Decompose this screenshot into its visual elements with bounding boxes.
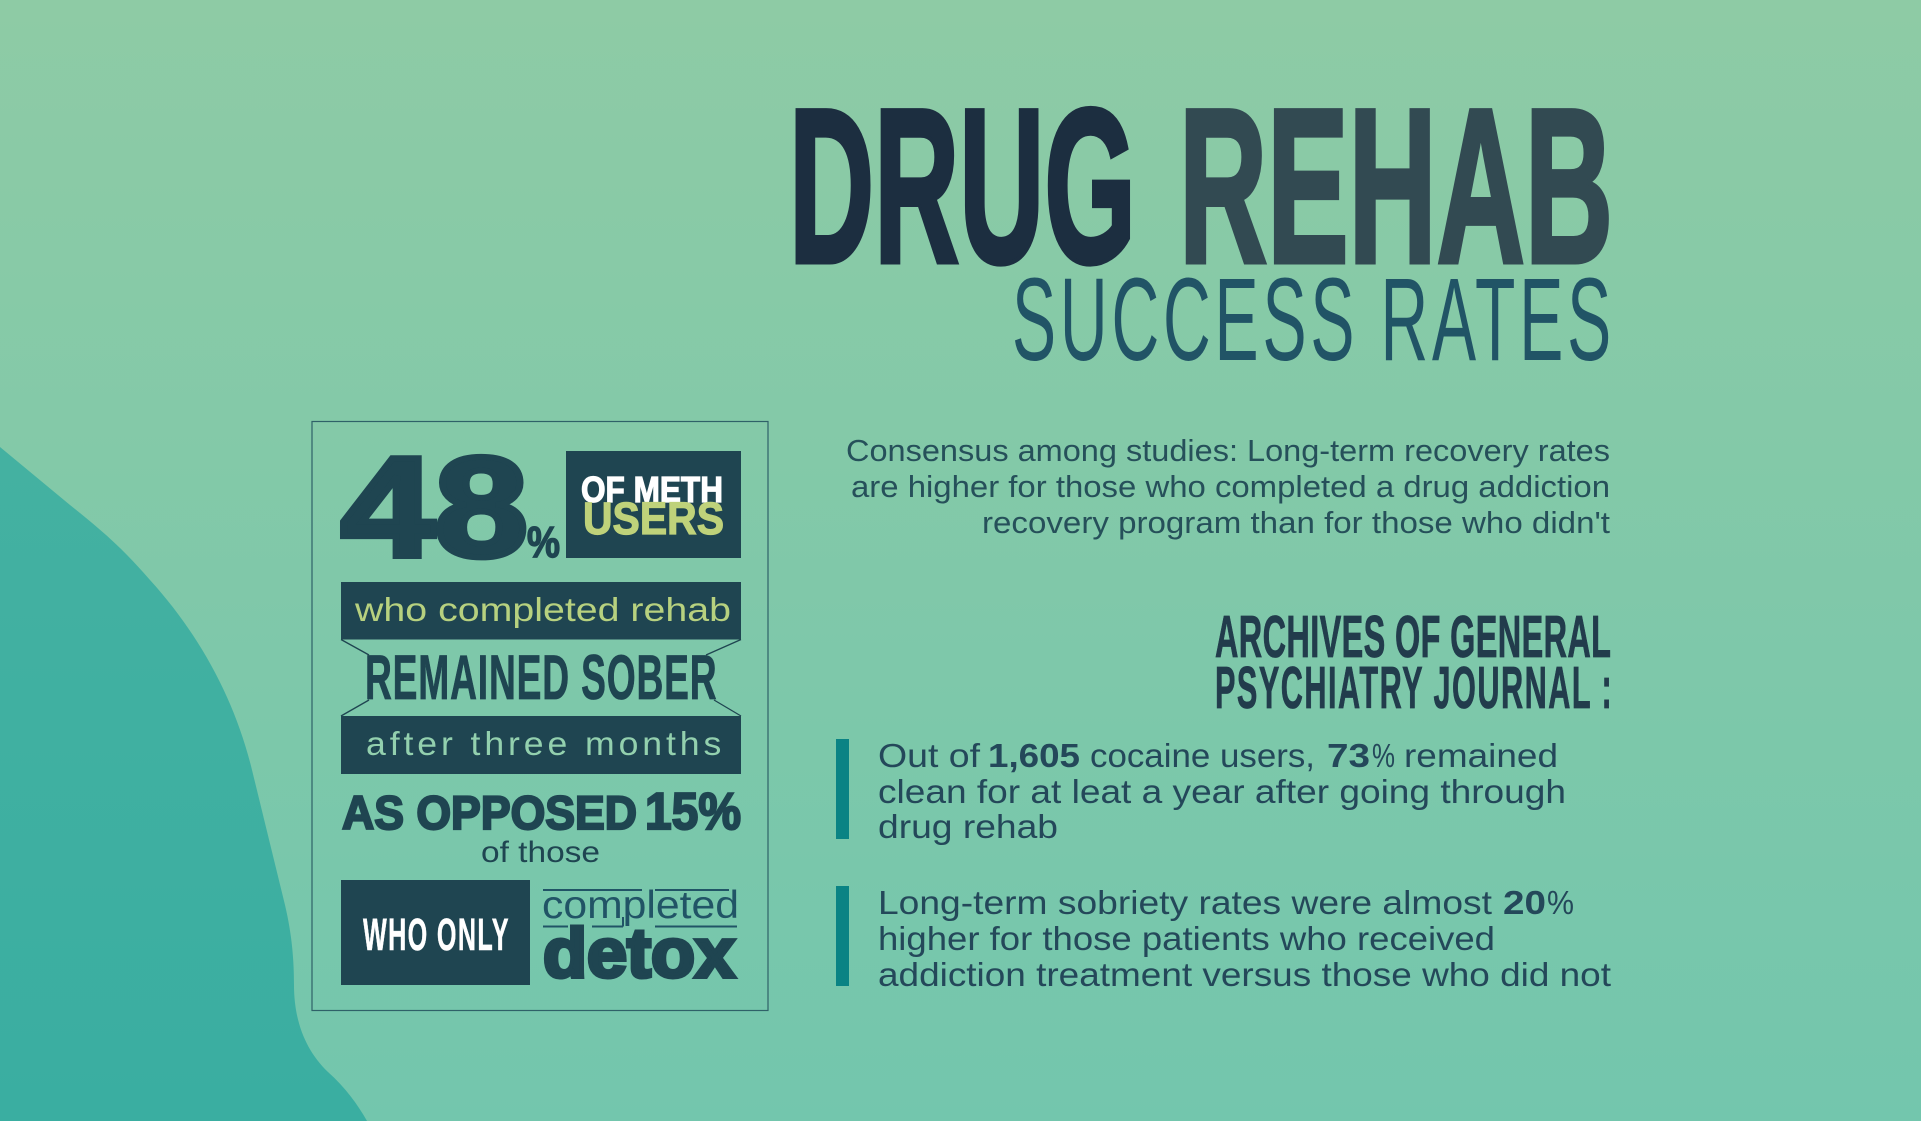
finding text: Long-term sobriety rates were almost (878, 884, 1492, 921)
box: who only: WHO ONLY (363, 909, 509, 960)
text: completed detox: completed (542, 884, 739, 927)
finding text: clean for at leat a year after going through (878, 773, 1566, 810)
label: of meth users: OF METH (581, 469, 723, 510)
ribbon folds (341, 640, 741, 716)
accent bar (836, 739, 849, 839)
finding: long-term sobriety (836, 884, 1611, 993)
statistic: 48 percent: 48 (341, 428, 528, 587)
label: of meth users (566, 451, 741, 558)
banner: who completed rehab: who completed rehab (354, 591, 731, 628)
intro paragraph (846, 433, 1610, 540)
finding text (878, 737, 1566, 845)
intro paragraph: Consensus among studies: Long-term recovery rates (846, 433, 1610, 468)
panel: meth users statistics (312, 422, 768, 1010)
finding text: higher for those patients who received (878, 920, 1495, 957)
banner: after three months (341, 716, 741, 774)
heading: archives of general psychiatry journal (1215, 605, 1612, 721)
heading: archives of general psychiatry journal: PSYCHIATRY JOURNAL : (1215, 654, 1612, 721)
finding text: % (1547, 884, 1574, 921)
statistic: as opposed 15 percent: 15% (645, 783, 741, 841)
intro paragraph: are higher for those who completed a drug addiction (851, 469, 1610, 504)
title: success rates: SUCCESS RATES (1012, 254, 1611, 386)
decorative teal blob (0, 447, 367, 1121)
finding text: drug rehab (878, 808, 1058, 845)
banner: after three months: after three months (366, 726, 721, 763)
text: remained sober: REMAINED SOBER (365, 642, 717, 712)
text: completed detox (542, 884, 739, 992)
finding text: 73 (1327, 737, 1370, 774)
statistic: as opposed 15 percent: AS OPPOSED (342, 786, 637, 839)
finding text: 20 (1503, 884, 1546, 921)
finding: cocaine users (836, 737, 1566, 845)
panel border (312, 422, 768, 1010)
finding text (878, 884, 1611, 993)
title (789, 63, 1613, 386)
banner: who completed rehab (341, 582, 741, 640)
finding text: 1,605 (988, 737, 1080, 774)
statistic: 48 percent: % (527, 518, 560, 567)
finding text: cocaine users, (1090, 737, 1315, 774)
finding text: addiction treatment versus those who did not (878, 956, 1611, 993)
heading: archives of general psychiatry journal: ARCHIVES OF GENERAL (1215, 605, 1611, 671)
label: of meth users: USERS (583, 493, 724, 544)
text: of those: of those (481, 836, 600, 869)
intro paragraph: recovery program than for those who didn't (982, 505, 1610, 540)
text: completed detox: detox (543, 914, 735, 992)
finding text: Out of (878, 737, 981, 774)
title: drug rehab: DRUG (789, 63, 1136, 309)
finding text: % (1372, 737, 1395, 774)
box: who only (341, 880, 530, 985)
accent bar (836, 886, 849, 986)
finding text: remained (1404, 737, 1558, 774)
